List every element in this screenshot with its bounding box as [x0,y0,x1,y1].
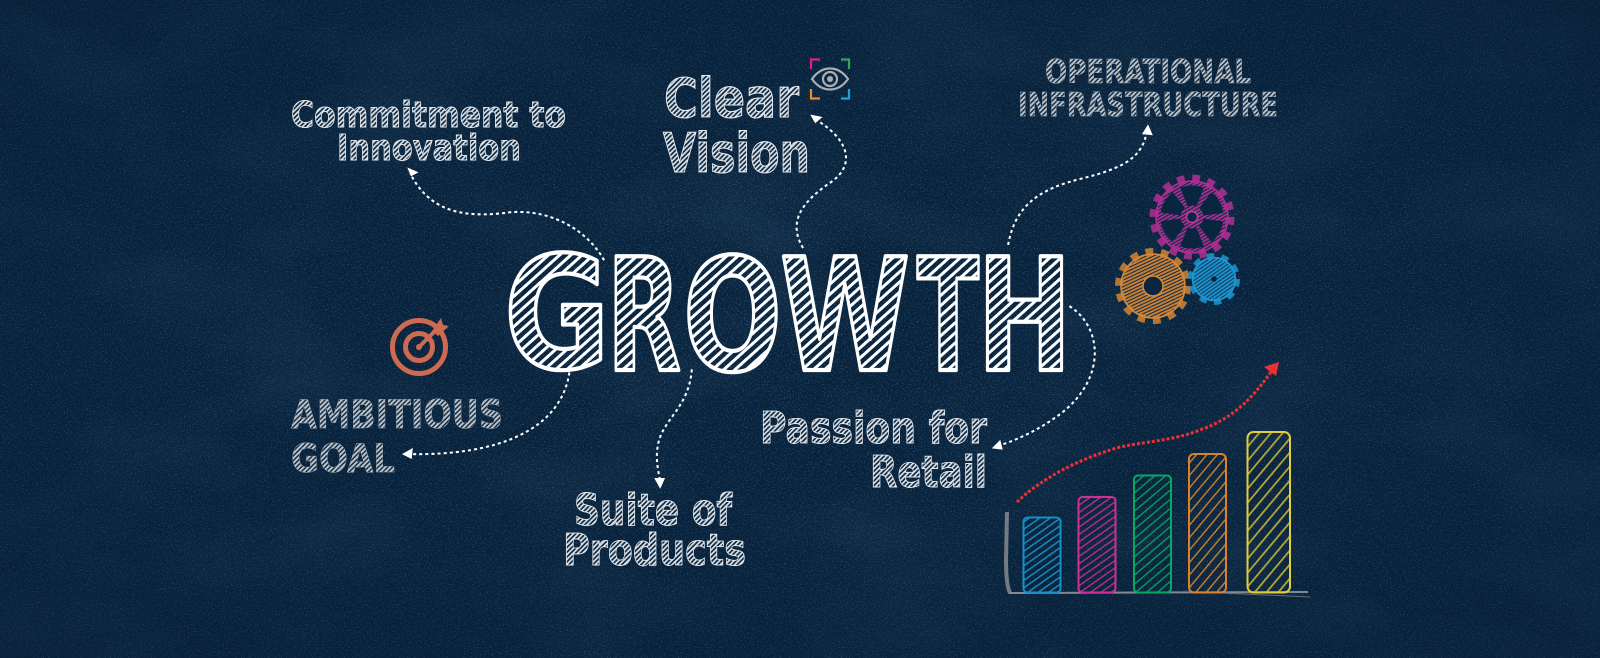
label: Clear Vision: Vision [663,122,810,185]
red growth arrow [1017,362,1279,502]
arrow: to Passion for Retail [993,306,1095,449]
arrow: to Commitment to Innovation [408,168,604,260]
label: Ambitious Goal: AMBITIOUS [291,393,503,438]
icon: purple gear [1154,179,1230,255]
icon: target [392,318,449,374]
label: Ambitious Goal: GOAL [291,437,395,482]
label: Clear Vision [663,67,810,185]
arrow: to Ambitious Goal [403,372,569,458]
bar: pink [1078,497,1116,592]
bar: blue [1024,518,1060,592]
label: Clear Vision: Clear [664,67,799,130]
label: Passion for Retail: Passion for [760,403,987,454]
bar chart [1006,432,1310,597]
label: Commitment to Innovation: Commitment to [291,95,566,136]
label: Commitment to Innovation [291,95,566,169]
central title: GROWTH: R [607,225,681,407]
label: Suite of Products: Products [563,525,746,576]
label: Suite of Products: Suite of [574,485,733,536]
label: Ambitious Goal [291,393,503,482]
icon: blue gear [1191,256,1237,302]
label: Operational Infrastructure [1018,52,1278,124]
central title: GROWTH: H [977,225,1072,407]
bar: green [1134,476,1171,592]
label: Operational Infrastructure: OPERATIONAL [1045,52,1251,91]
chart axes [1006,512,1310,597]
label: Passion for Retail [760,403,987,498]
central title: GROWTH: O [683,225,782,407]
label: Suite of Products [563,485,746,576]
label: Commitment to Innovation: Innovation [337,128,521,169]
icon: eye in focus frame [811,60,849,98]
icon: orange gear [1119,252,1187,320]
bar: orange [1189,454,1226,592]
arrow: to Operational Infrastructure [1008,126,1152,245]
central title: GROWTH [504,223,1072,407]
arrow: to Clear Vision [797,115,846,248]
central title: GROWTH: G [504,223,610,405]
central title: GROWTH: T [917,225,979,407]
label: Passion for Retail: Retail [870,447,987,498]
bar: yellow [1248,432,1290,592]
arrow: to Suite of Products [655,369,692,488]
central title: GROWTH: W [780,225,910,407]
label: Operational Infrastructure: INFRASTRUCTURE [1018,85,1278,124]
